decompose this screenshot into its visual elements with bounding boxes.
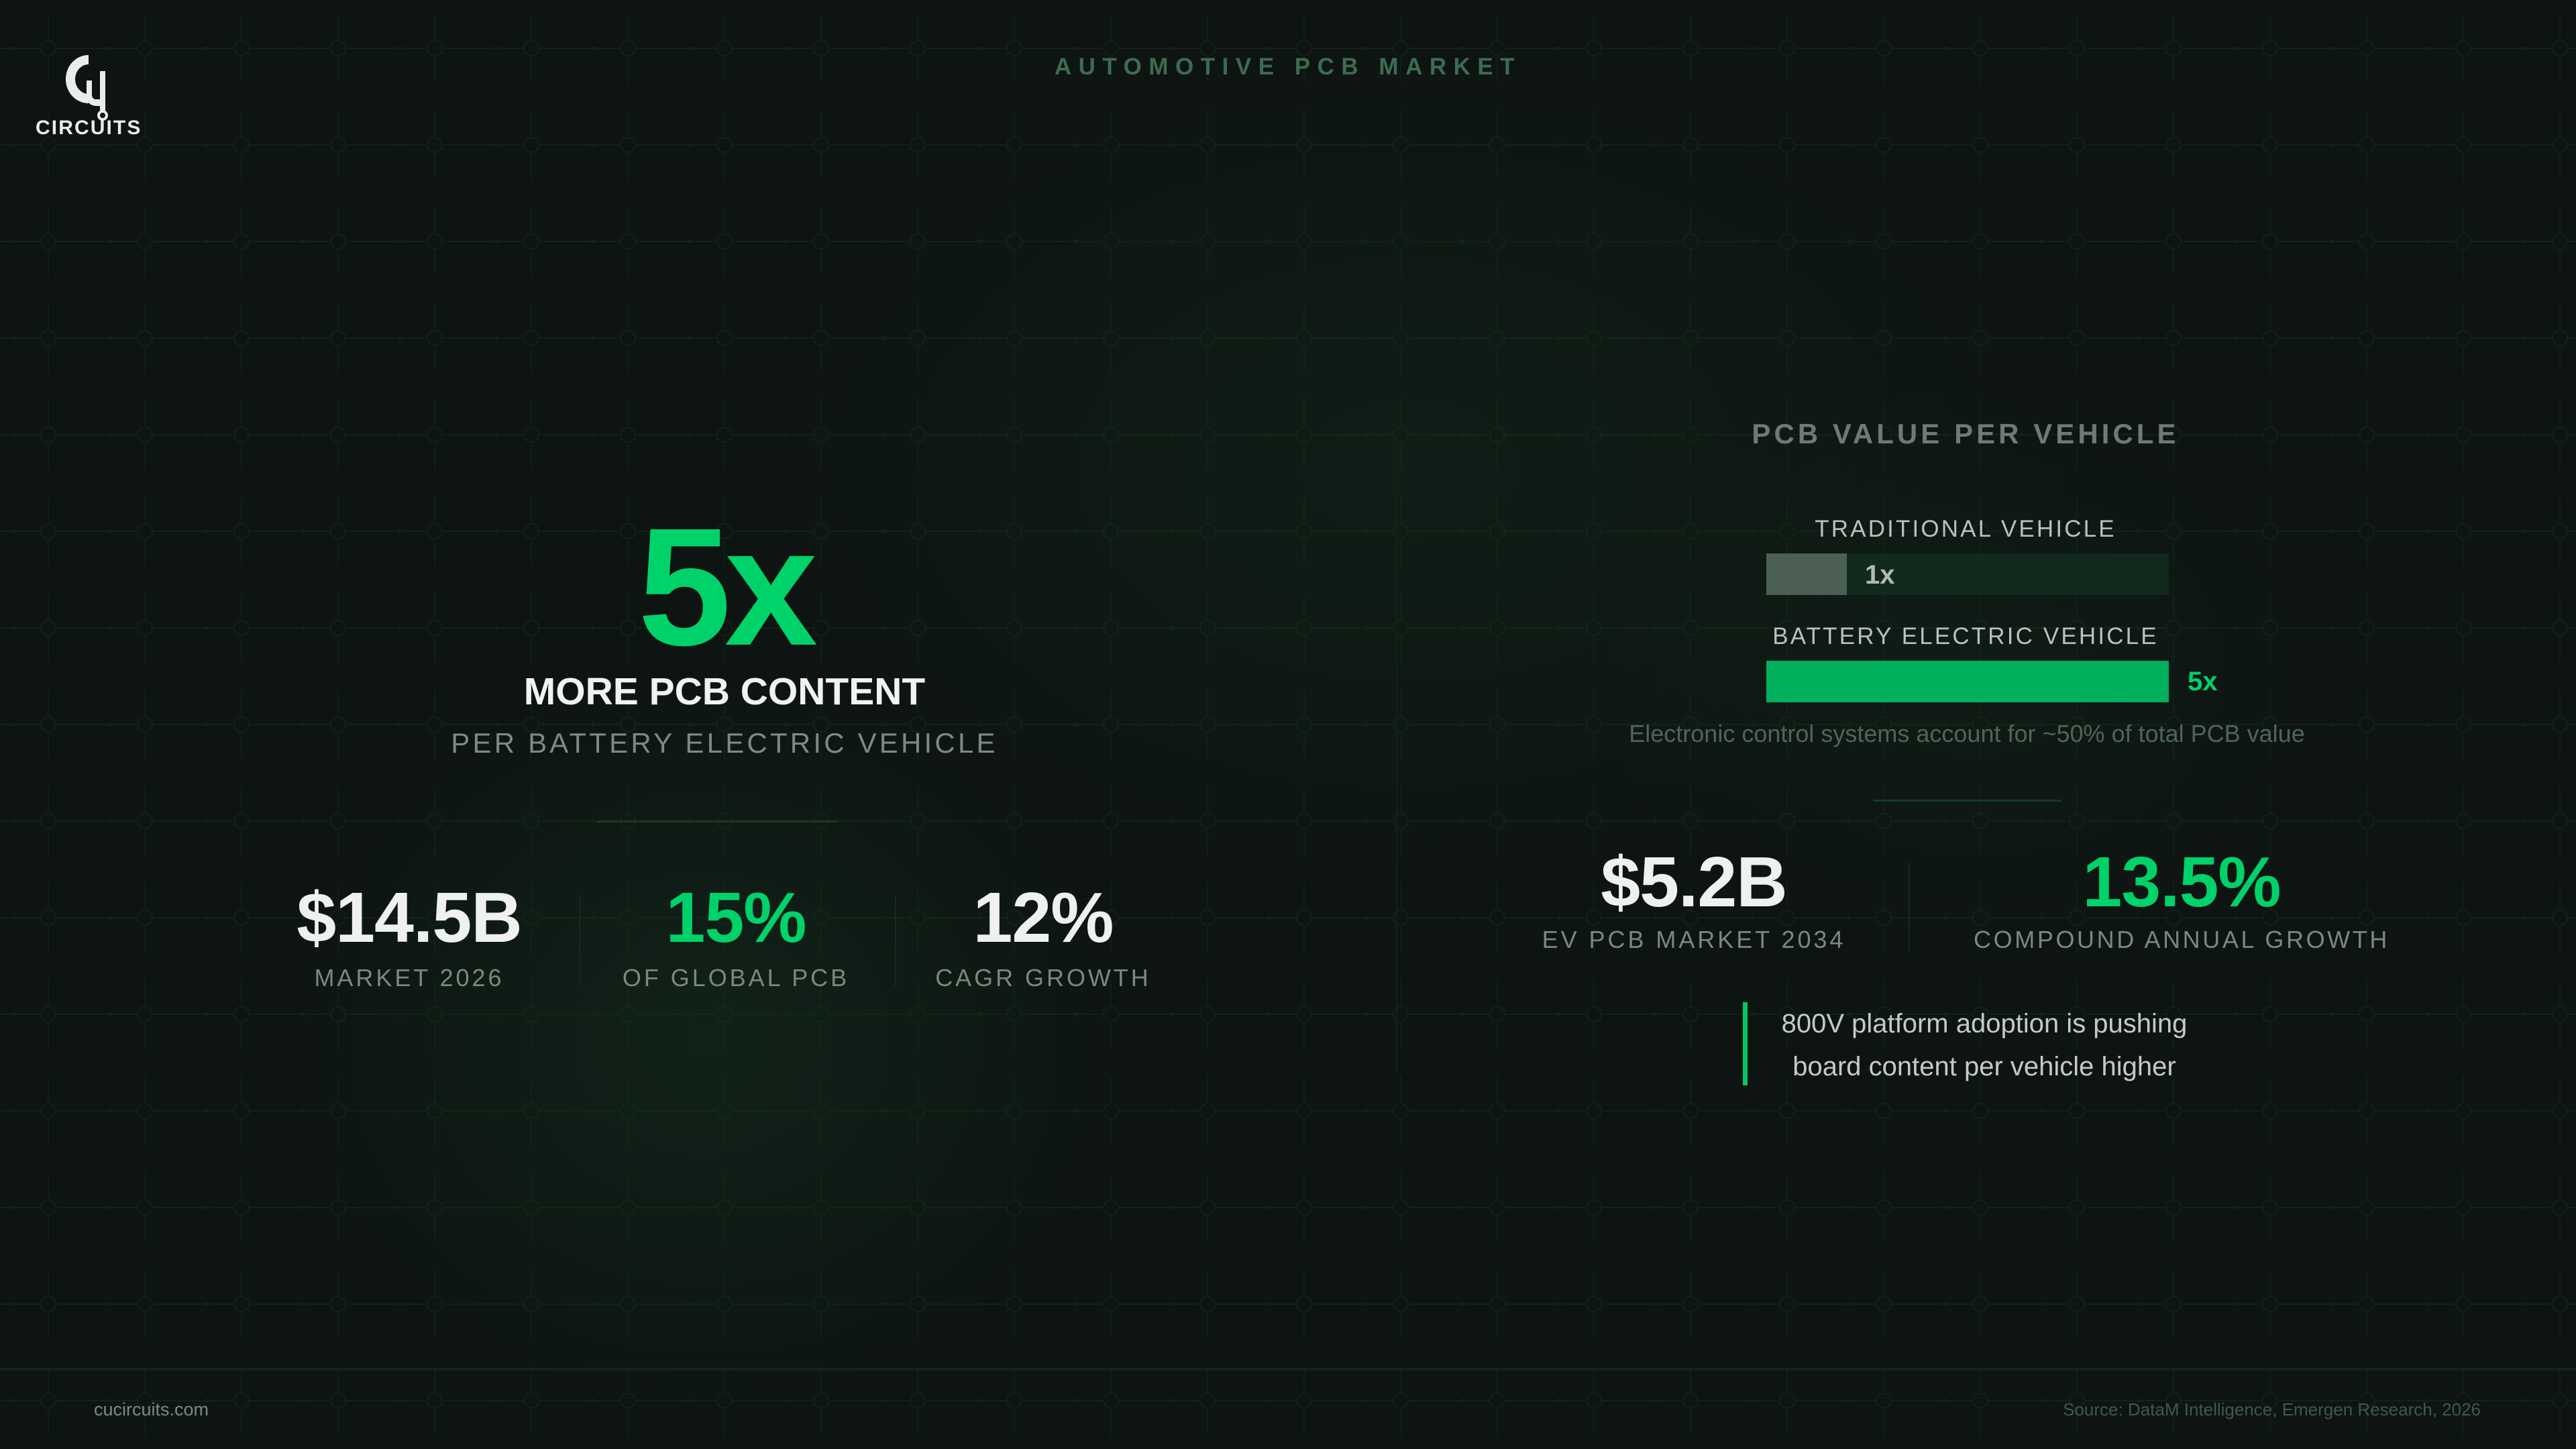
- hero subheading: PER BATTERY ELECTRIC VEHICLE: [451, 727, 998, 759]
- stat: market 2026: [297, 878, 522, 991]
- bar: BEV 5x: 5x: [2188, 667, 2218, 696]
- stat: global share: 15%: [665, 878, 806, 957]
- label: BEV: BATTERY ELECTRIC VEHICLE: [1772, 623, 2159, 649]
- panel: PCB value per vehicle: [1752, 418, 2218, 702]
- callout: 800V: board content per vehicle higher: [1792, 1052, 2176, 1081]
- stat: CAGR: [935, 878, 1151, 991]
- bar: traditional 1x: 1x: [1865, 560, 1894, 590]
- hero number: 5x: [638, 493, 811, 680]
- stat: market 2026: $14.5B: [297, 878, 522, 957]
- hero headline: MORE PCB CONTENT: [524, 670, 925, 713]
- callout: 800V: 800V platform adoption is pushing: [1782, 1009, 2187, 1038]
- footer: source: Source: DataM Intelligence, Emergen Research, 2026: [2063, 1399, 2481, 1419]
- logo: [36, 55, 142, 139]
- stat: CAGR: 12%: [973, 878, 1113, 957]
- stat: CAGR 13.5: 13.5%: [2082, 843, 2281, 922]
- icon: Cu mark: [66, 55, 108, 121]
- logo text: CIRCUITS: [36, 117, 142, 139]
- stat: EV PCB market: $5.2B: [1601, 843, 1787, 922]
- label: traditional: TRADITIONAL VEHICLE: [1815, 516, 2116, 542]
- callout: 800V: [1743, 1002, 2187, 1085]
- stat: market 2026: MARKET 2026: [314, 964, 504, 991]
- caption: Electronic control systems account for ~50% of total PCB value: [1629, 720, 2305, 747]
- panel: left hero: [451, 493, 998, 822]
- stat: CAGR 13.5: COMPOUND ANNUAL GROWTH: [1974, 926, 2390, 953]
- bar: traditional 1x: [1766, 553, 2169, 595]
- footer: url: cucircuits.com: [94, 1399, 209, 1419]
- stat: CAGR: CAGR GROWTH: [935, 964, 1151, 991]
- bar: BEV 5x: [1766, 661, 2218, 702]
- title: AUTOMOTIVE PCB MARKET: [1055, 54, 1521, 80]
- panel heading: PCB VALUE PER VEHICLE: [1752, 418, 2180, 449]
- stat: EV PCB market: EV PCB MARKET 2034: [1542, 926, 1845, 953]
- stat: CAGR 13.5: [1974, 843, 2390, 953]
- stat: global share: OF GLOBAL PCB: [623, 964, 849, 991]
- stat: global share: [623, 878, 849, 991]
- stat: EV PCB market: [1542, 843, 1845, 953]
